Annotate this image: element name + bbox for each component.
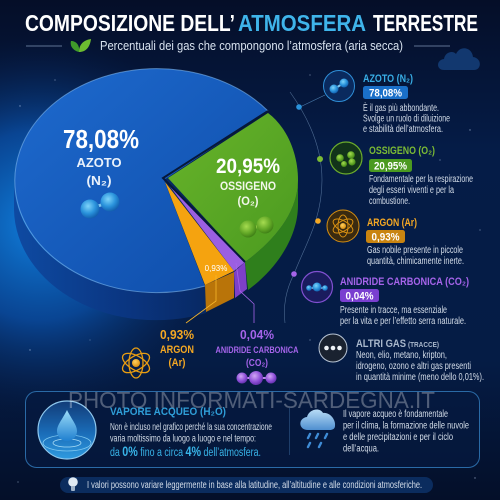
icon: light bulb — [68, 477, 78, 491]
orange slice — [165, 182, 234, 285]
icon: argon atom — [120, 348, 152, 378]
purple wall — [234, 262, 247, 298]
title: COMPOSIZIONE DELL’ — [25, 10, 235, 36]
label: carbon dioxide below pie: (CO₂) — [246, 357, 268, 369]
slice gap — [163, 111, 268, 262]
value badge: 0,04% — [346, 290, 374, 302]
panel: altri gas: (TRACCE) — [408, 340, 439, 349]
panel: ossigeno: OSSIGENO (O₂) — [369, 145, 435, 157]
icon: cloud top right — [438, 48, 480, 70]
label: azoto — [63, 124, 139, 188]
label: carbon dioxide below pie — [216, 328, 299, 369]
label: azoto: (N₂) — [86, 173, 112, 188]
note bar — [60, 477, 433, 493]
panel: altri gas: ALTRI GAS — [356, 338, 406, 350]
panel: altri gas — [319, 334, 484, 383]
panel: azoto: AZOTO (N₂) — [363, 73, 413, 85]
label: argon below pie: (Ar) — [168, 357, 186, 369]
panel: anidride carbonica: Presente in tracce, ma essenziale — [340, 305, 447, 316]
icon: water drop — [38, 401, 96, 459]
icon: carbon dioxide — [302, 272, 332, 302]
watermark: PHOTO INFORMATI-SARDEGNA.IT — [68, 387, 435, 413]
label: ossigeno: (O₂) — [238, 196, 259, 208]
panel: vapore acqueo: dell’acqua. — [343, 444, 379, 454]
panel: vapore acqueo: Non è incluso nel grafico perché la sua concentrazione — [110, 422, 272, 433]
green wall — [245, 180, 298, 290]
icon: leaves — [71, 39, 91, 52]
label: argon below pie: ARGON — [160, 344, 194, 356]
panel: argon: quantità, chimicamente inerte. — [367, 256, 464, 267]
icon: O2 molecule — [240, 216, 274, 238]
panel: azoto: È il gas più abbondante. — [363, 101, 439, 114]
panel: anidride carbonica — [302, 272, 469, 327]
panel: argon — [327, 210, 464, 267]
title — [25, 10, 478, 36]
panel: azoto — [324, 70, 450, 135]
blue rim highlight — [15, 69, 268, 293]
connector arc — [284, 92, 325, 323]
subtitle: Percentuali dei gas che compongono l’atmosfera (aria secca) — [100, 38, 403, 53]
icon: N2 molecule — [80, 192, 120, 218]
label: carbon dioxide below pie: 0,04% — [240, 328, 274, 342]
connector: carbon dioxide — [236, 263, 254, 323]
icon: rain cloud — [300, 410, 335, 447]
icon: CO2 molecule — [236, 371, 276, 385]
label: ossigeno: 20,95% — [216, 155, 280, 178]
label: carbon dioxide below pie: ANIDRIDE CARBONICA — [216, 345, 299, 356]
panel: azoto: e stabilità dell’atmosfera. — [363, 124, 443, 135]
panel: vapore acqueo — [26, 392, 480, 468]
panel: argon: ARGON (Ar) — [367, 217, 417, 229]
icon: ossigeno — [330, 142, 362, 174]
panel: azoto: Svolge un ruolo di diluizione — [363, 114, 450, 124]
label: azoto: 78,08% — [63, 124, 139, 154]
water vapour range: da 0% fino a circa 4% dell’atmosfera. — [110, 443, 261, 459]
label: inner argon value: 0,93% — [205, 264, 227, 273]
title: ATMOSFERA — [238, 10, 366, 36]
panel: ossigeno: degli esseri viventi e per la — [369, 185, 454, 196]
blue wall — [14, 181, 206, 320]
panel: vapore acqueo: Il vapore acqueo è fondamentale — [343, 409, 448, 420]
label: argon below pie: 0,93% — [160, 328, 194, 342]
connector: argon — [186, 275, 216, 323]
icon: azoto — [324, 70, 354, 102]
panel: vapore acqueo: VAPORE ACQUEO (H₂O) — [110, 406, 226, 418]
value badge: 78,08% — [369, 88, 402, 100]
panel: vapore acqueo: varia moltissimo da luogo a luogo e nel tempo: — [110, 434, 256, 444]
panel: ossigeno — [330, 142, 473, 207]
icon: other gases — [319, 334, 347, 362]
green slice — [168, 113, 298, 262]
value badge: 20,95% — [374, 160, 407, 172]
icon: argon — [327, 210, 359, 242]
panel: altri gas: Neon, elio, metano, kripton, — [356, 350, 447, 361]
value badge: 0,93% — [372, 232, 400, 244]
purple slice — [165, 180, 245, 271]
label: argon below pie — [160, 328, 194, 369]
label: ossigeno — [216, 155, 280, 208]
orange wall — [205, 272, 234, 312]
blue slice — [15, 69, 268, 293]
label: ossigeno: OSSIGENO — [220, 181, 276, 193]
label: azoto: AZOTO — [76, 155, 122, 170]
panel: vapore acqueo: e delle precipitazioni e per il ciclo — [343, 432, 453, 443]
panel: ossigeno: combustione. — [369, 196, 410, 207]
panel: anidride carbonica: ANIDRIDE CARBONICA (CO₂) — [340, 276, 469, 288]
panel: argon: Gas nobile presente in piccole — [367, 245, 463, 256]
pie chart — [14, 69, 298, 320]
